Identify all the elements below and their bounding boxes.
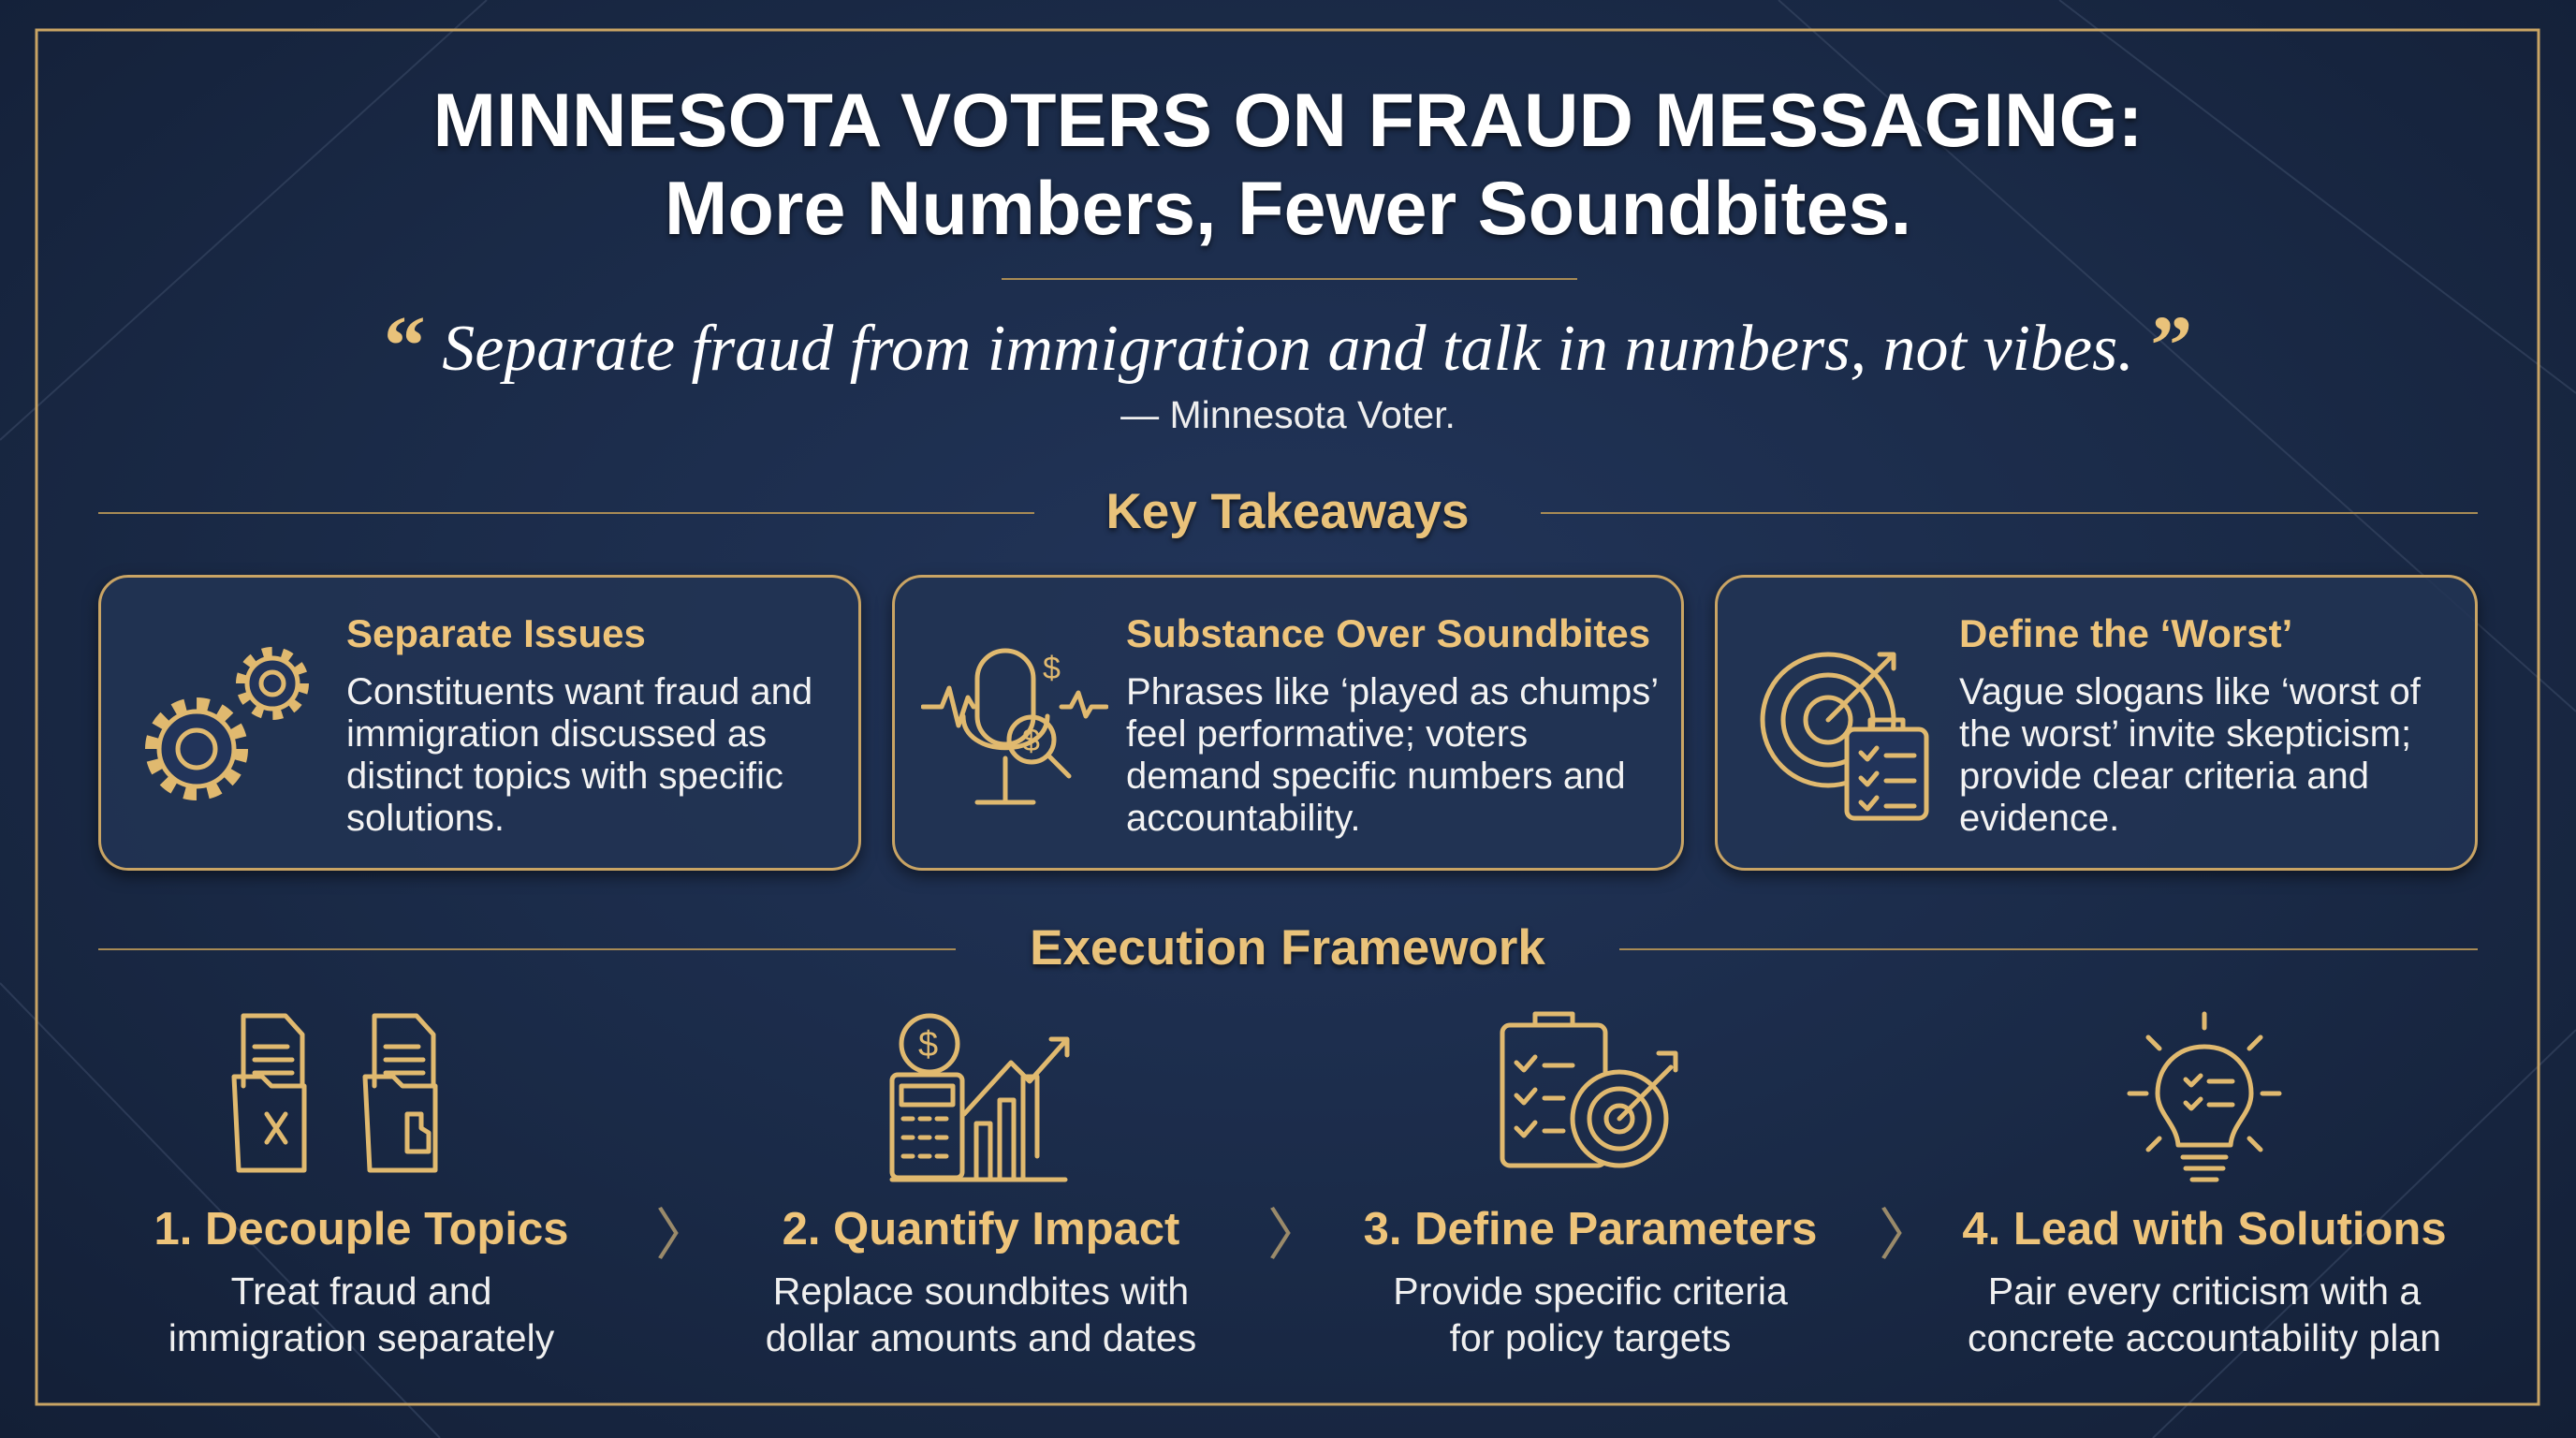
icon: target with clipboard — [1760, 652, 1928, 820]
icon: microphone: $ — [1043, 651, 1061, 686]
step 2 — [766, 1204, 1196, 1359]
step 1: 1. Decouple Topics — [154, 1204, 568, 1255]
panel: separate issues: Separate Issues — [346, 611, 646, 655]
title: More Numbers, Fewer Soundbites. — [665, 167, 1911, 251]
step 4: concrete accountability plan — [1968, 1316, 2441, 1359]
arrow 1: 〉 — [655, 1204, 711, 1267]
icon: microphone — [921, 648, 1108, 805]
icon: gears — [145, 647, 309, 800]
icon: microphone: $ — [1022, 723, 1040, 758]
panel: define the worst: Define the ‘Worst’ — [1959, 611, 2292, 655]
panel: substance over soundbites — [892, 575, 1684, 871]
step 3: 3. Define Parameters — [1364, 1204, 1817, 1255]
step 1: Treat fraud and — [231, 1269, 491, 1313]
quote: “ Separate fraud from immigration and talk in numbers, not vibes. ” — [384, 300, 2192, 392]
panel: substance over soundbites: Phrases like ‘played as chumps’ feel performative; voters demand specific numbers and accountability. — [1126, 671, 1658, 839]
icon: calculator chart: $ — [918, 1025, 938, 1064]
icon: clipboard target — [1500, 1011, 1677, 1168]
panel: define the worst — [1715, 575, 2478, 871]
heading: key takeaways: Key Takeaways — [1106, 484, 1469, 539]
icon: folders — [232, 1013, 438, 1172]
step 3 — [1364, 1204, 1817, 1359]
step 2: Replace soundbites with — [773, 1269, 1189, 1313]
step 4: 4. Lead with Solutions — [1962, 1204, 2447, 1255]
arrow 2: 〉 — [1267, 1204, 1324, 1267]
panel: define the worst: Vague slogans like ‘worst of the worst’ invite skepticism; provide clear criteria and evidence. — [1959, 671, 2421, 839]
panel: separate issues: Constituents want fraud and immigration discussed as distinct topics with specific solutions. — [346, 671, 812, 839]
step 1 — [154, 1204, 568, 1359]
step 4: Pair every criticism with a — [1988, 1269, 2421, 1313]
step 3: for policy targets — [1450, 1316, 1731, 1359]
step 4 — [1962, 1204, 2447, 1359]
step 1: immigration separately — [168, 1316, 554, 1359]
attribution: — Minnesota Voter. — [1120, 393, 1456, 436]
panel: substance over soundbites: Substance Over Soundbites — [1126, 611, 1650, 655]
arrow 3: 〉 — [1879, 1204, 1935, 1267]
panel: separate issues — [98, 575, 861, 871]
heading: execution framework: Execution Framework — [1030, 920, 1545, 976]
title — [432, 79, 2144, 251]
step 2: 2. Quantify Impact — [783, 1204, 1179, 1255]
title: MINNESOTA VOTERS ON FRAUD MESSAGING: — [432, 79, 2144, 163]
step 2: dollar amounts and dates — [766, 1316, 1196, 1359]
icon: lightbulb — [2127, 1011, 2282, 1181]
icon: calculator chart — [889, 1013, 1069, 1181]
step 3: Provide specific criteria — [1393, 1269, 1788, 1313]
